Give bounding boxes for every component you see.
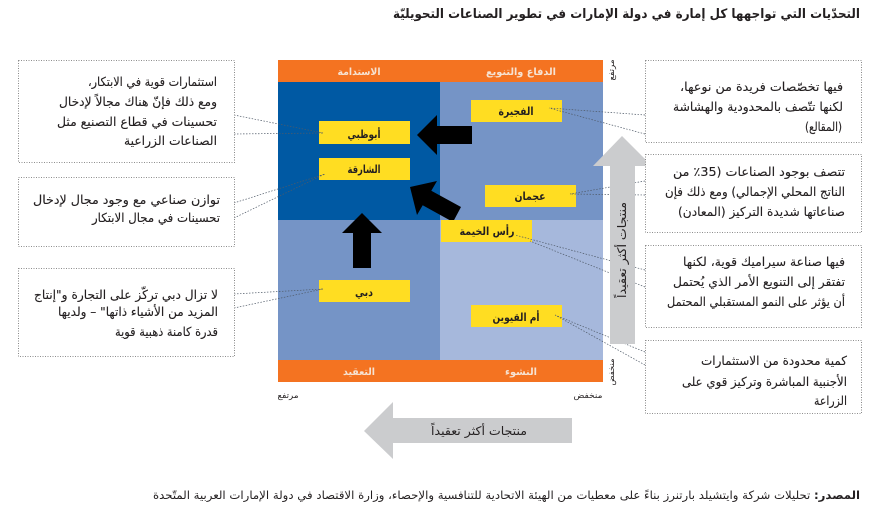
label: Abu Dhabi: أبوظبي [348,127,380,141]
label: Ajman: عجمان [514,190,546,203]
callout: Ras Al Khaimah [646,246,862,328]
callout: Umm Al Quwain [646,340,862,414]
callout: Umm Al Quwain: الأجنبية المباشرة وتركيز قوي على [682,374,847,390]
arrow: from Ajman side to Sharjah [410,181,461,222]
callout: Ras Al Khaimah: أن يؤثر على النمو المستقبلي المحتمل [667,293,845,310]
quadrant: emergence [440,220,603,360]
arrow: from Dubai up [342,213,382,268]
callout: Ajman: تتصف بوجود الصناعات (35٪ من [673,164,846,180]
callout: Abu Dhabi [18,60,234,162]
callout: Ras Al Khaimah: تفتقر إلى التنويع الأمر الذي يُحتمل [673,274,845,290]
callout: Sharjah [18,178,234,246]
callout: Abu Dhabi: استثمارات قوية في الابتكار، [88,74,217,90]
callout: Ras Al Khaimah: فيها صناعة سيراميك قوية، لكنها [683,254,845,270]
axis label: high, vertical: مرتفع [607,60,616,80]
bottom header band [278,360,603,382]
callout: Fujairah: (المقالع) [805,119,842,134]
callout: Abu Dhabi: الصناعات الزراعية [124,133,217,149]
label: Dubai [319,280,410,302]
callout: Dubai: المزيد من الأشياء ذاتها" – ولديها [58,304,218,320]
top header band: الاستدامة [338,67,380,78]
callout: Umm Al Quwain: الزراعة [814,393,847,409]
callout: Sharjah: تحسينات في مجال الابتكار [91,210,220,226]
leader lines [234,108,645,365]
callout: Abu Dhabi: ومع ذلك فإنّ هناك مجالاً لإدخال [59,93,217,110]
quadrant: defence and diversification [440,82,603,220]
callout: Dubai [18,268,234,356]
axis label: low, horizontal: منخفض [574,391,602,400]
callout: Fujairah: فيها تخصّصات فريدة من نوعها، [680,79,843,95]
quadrant: sustainability [278,82,440,220]
horizontal gray arrow: more complex products: منتجات أكثر تعقيداً [431,422,527,439]
label: Ras Al Khaimah: رأس الخيمة [460,224,514,238]
quadrant: complexity [278,220,440,360]
label: Umm Al Quwain: أم القيوين [492,310,540,324]
label: Ras Al Khaimah [441,220,532,242]
vertical gray arrow: more complex products [593,136,652,344]
axis label: high, horizontal: مرتفع [278,391,298,400]
horizontal gray arrow: more complex products [364,402,572,459]
axis label: low, vertical: منخفض [607,359,616,385]
bottom header band: التعقيد [343,367,375,378]
bottom header band: النشوء [505,367,537,378]
label: Sharjah: الشارقة [348,163,380,176]
vertical gray arrow: more complex products: منتجات أكثر تعقيداً [613,202,630,298]
label: Fujairah [471,100,562,122]
label: Dubai: دبي [355,286,373,299]
top header band: الدفاع والتنويع [486,67,556,78]
top header band [278,60,603,82]
matrix chart [278,60,603,382]
callout: Abu Dhabi: تحسينات في قطاع التصنيع مثل [57,114,218,129]
callout: Fujairah [646,60,862,142]
source note: المصدر: تحليلات شركة وايتشيلد بارتنرز بناءً على معطيات من الهيئة الاتحادية للتنافسية والإحصاء، وزارة الاقتصاد في دولة الإمارات العربية المتّحدة [153,488,860,503]
arrow: from Fujairah side to Abu Dhabi [417,115,472,155]
label: Umm Al Quwain [471,305,562,327]
callout: Sharjah: توازن صناعي مع وجود مجال لإدخال [33,192,221,208]
callout: Umm Al Quwain: كمية محدودة من الاستثمارات [701,353,847,369]
callout: Dubai: قدرة كامنة ذهبية قوية [115,324,218,340]
callout: Ajman: صناعاتها شديدة التركيز (المعادن) [678,204,845,220]
callout: Ajman: الناتج المحلي الإجمالي) ومع ذلك فإن [665,184,845,200]
label: Fujairah: الفجيرة [498,105,534,118]
label: Abu Dhabi [319,121,410,144]
label: Ajman [485,185,576,207]
callout: Ajman [646,154,862,232]
callout: Fujairah: لكنها تتّصف بالمحدودية والهشاشة [673,99,843,115]
label: Sharjah [319,158,410,180]
title: التحدّيات التي تواجهها كل إمارة في دولة الإمارات في تطوير الصناعات التحويليّة [393,7,860,22]
callout: Dubai: لا تزال دبي تركّز على التجارة و"إنتاج [34,286,218,303]
